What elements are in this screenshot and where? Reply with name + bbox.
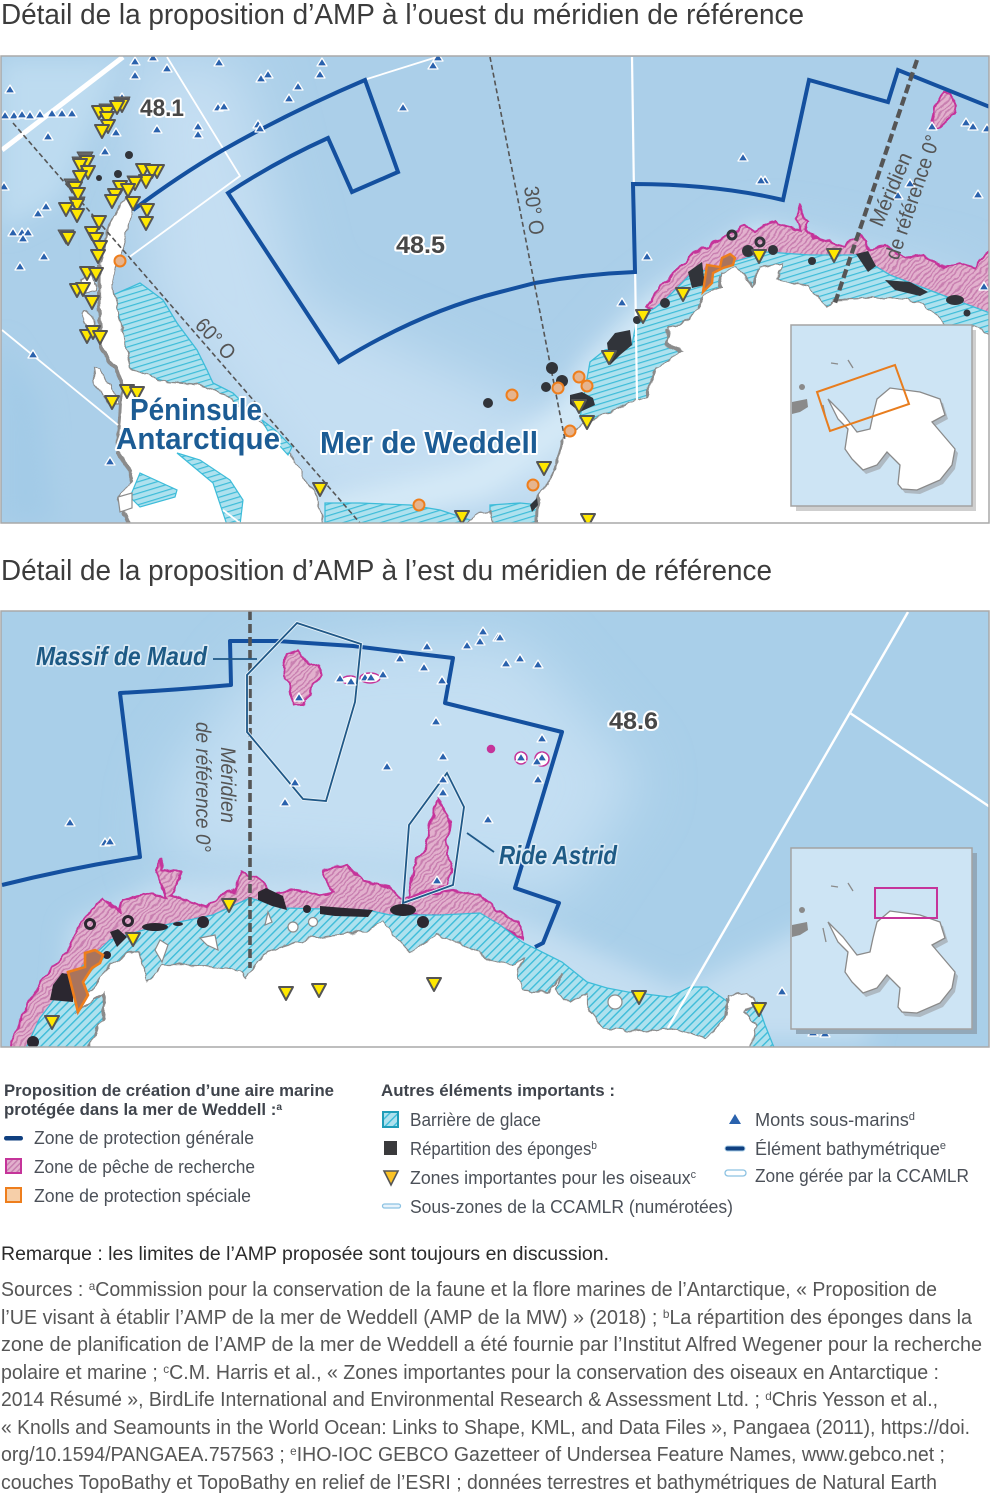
label: Mer de Weddell: Mer de Weddell (320, 425, 538, 460)
legend item: CCAMLR managed zone: Zone gérée par la CCAMLR (755, 1166, 969, 1186)
title: map east: Détail de la proposition d’AMP à l’est du méridien de référence (1, 555, 772, 587)
legend heading: proposed MPA: Proposition de création d’une aire marine (4, 1082, 334, 1100)
sources text: C.M. Harris et al., « Zones importantes pour la conservation des oiseaux en Antarctique : (169, 1362, 939, 1384)
legend heading: proposed MPA: protégée dans la mer de Weddell : (4, 1101, 271, 1119)
ocean background (0, 610, 990, 1048)
legend item: sponges: b (591, 1140, 597, 1152)
sources text: e (290, 1444, 297, 1458)
special protection zone (703, 254, 735, 292)
research fishing zone (647, 207, 990, 320)
seamounts (0, 53, 990, 465)
map: east of reference meridian (0, 610, 990, 1048)
legend item: special protection zone: Zone de protection spéciale (34, 1186, 251, 1206)
legend item: sponges: Répartition des éponges (410, 1139, 605, 1159)
coast shadow (96, 200, 833, 522)
legend item: seamounts: d (909, 1111, 915, 1123)
label: Méridien: Méridien (216, 747, 239, 823)
sources text: d (765, 1389, 772, 1403)
legend heading: proposed MPA (4, 1082, 334, 1119)
sources text: La répartition des éponges dans la (669, 1307, 973, 1329)
ice shelves (25, 898, 775, 1050)
sponge distribution (96, 151, 970, 512)
ice shelves: under land (113, 252, 990, 525)
important bird areas (58, 97, 841, 527)
sources text: 2014 Résumé », BirdLife International and Environmental Research & Assessment Ltd. ; (1, 1389, 783, 1411)
important bird areas (45, 899, 766, 1029)
sources text: b (663, 1307, 670, 1321)
sources text (1, 1279, 982, 1493)
CCAMLR subarea lines (668, 612, 990, 1028)
small research fishing patches (488, 746, 549, 766)
legend item: seamounts: Monts sous-marins (755, 1110, 907, 1130)
bathymetric feature: Ride Astrid (403, 773, 464, 903)
reference meridian (248, 611, 252, 968)
sources text: polaire et marine ; (1, 1362, 161, 1384)
sources text: Commission pour la conservation de la faune et la flore marines de l’Antarctique, « Proposition de (95, 1279, 937, 1301)
coast shadow (74, 940, 751, 1046)
legend item: general protection zone: Zone de protection générale (34, 1128, 254, 1148)
legend item: bird areas: c (691, 1169, 696, 1181)
note: Remarque : les limites de l’AMP proposée sont toujours en discussion. (1, 1244, 609, 1265)
research fishing zone: Maud Rise (284, 650, 322, 704)
sources text: c (163, 1362, 169, 1376)
sources text: l’UE visant à établir l’AMP de la mer de Weddell (AMP de la MW) » (2018) ; (1, 1307, 667, 1329)
ocean background (0, 56, 990, 524)
legend item: bathymetric feature: e (940, 1140, 946, 1152)
label: Antarctique: Antarctique (116, 421, 280, 456)
label: 30° O: 30° O (519, 185, 548, 236)
legend item: ice shelf: Barrière de glace (410, 1110, 541, 1130)
label: Péninsule: Péninsule (130, 392, 262, 427)
note and sources (1, 1244, 982, 1493)
research fishing zone: islet (931, 92, 956, 127)
research fishing zone: Astrid Ridge (408, 798, 452, 898)
sources text: « Knolls and Seamounts in the World Ocean: Links to Shape, KML, and Data Files », Pangaea (2011), https://doi. (1, 1417, 970, 1439)
land: Antarctica and peninsula (78, 198, 990, 535)
ice shelves: lower peninsula (130, 420, 292, 525)
label: 48.1: 48.1 (140, 95, 184, 122)
CCAMLR subarea lines (2, 57, 637, 523)
legend heading: proposed MPA: a (276, 1102, 282, 1113)
sources text: Sources : (1, 1279, 85, 1301)
special protection zone (68, 950, 103, 1012)
orange circles: special protection zones (114, 256, 592, 510)
meridian lines (13, 57, 917, 523)
label: Ride Astrid: Ride Astrid (499, 840, 618, 870)
sources text: IHO-IOC GEBCO Gazetteer of Undersea Feature Names, www.gebco.net ; (297, 1444, 945, 1466)
sources text: Chris Yesson et al., (772, 1389, 938, 1411)
research fishing zone: coast (5, 858, 523, 1060)
label: 60° O: 60° O (190, 314, 240, 365)
AMP general protection zone boundary (133, 70, 990, 362)
AMP general protection zone boundary (2, 641, 562, 947)
research fishing islets east of Maud Rise (342, 673, 380, 684)
bathymetric feature: Massif de Maud (247, 623, 361, 801)
legend item: CCAMLR subareas: Sous-zones de la CCAMLR (numérotées) (410, 1197, 733, 1217)
legend item: bathymetric feature: Élément bathymétrique (755, 1139, 940, 1159)
land: Antarctica (77, 912, 757, 1060)
legend item: research fishing zone: Zone de pêche de recherche (34, 1157, 255, 1177)
callout leader lines (213, 659, 494, 852)
label: Méridien: Méridien (865, 149, 917, 230)
sources text: a (89, 1279, 96, 1293)
label: 48.5: 48.5 (396, 232, 445, 259)
island: lower peninsula (118, 493, 132, 512)
legend (4, 1082, 969, 1217)
label: de référence 0°: de référence 0° (191, 722, 214, 852)
legend item: bird areas: Zones importantes pour les oiseaux (410, 1168, 695, 1188)
sources text: zone de planification de l’AMP de la mer de Weddell a été fournie par l’Institut Alfred Wegener pour la recherche (1, 1334, 982, 1356)
seamounts (65, 627, 830, 1037)
sources text: org/10.1594/PANGAEA.757563 ; (1, 1444, 292, 1466)
label: Massif de Maud: Massif de Maud (36, 641, 208, 671)
inset map: Antarctica locator (791, 848, 977, 1034)
label: 48.6: 48.6 (609, 708, 658, 735)
sponge distribution (27, 888, 429, 1048)
map: west of reference meridian (0, 55, 990, 524)
legend heading: other features: Autres éléments importants : (381, 1082, 615, 1100)
inset map: Antarctica locator (791, 325, 976, 511)
label: de référence 0°: de référence 0° (881, 132, 945, 263)
